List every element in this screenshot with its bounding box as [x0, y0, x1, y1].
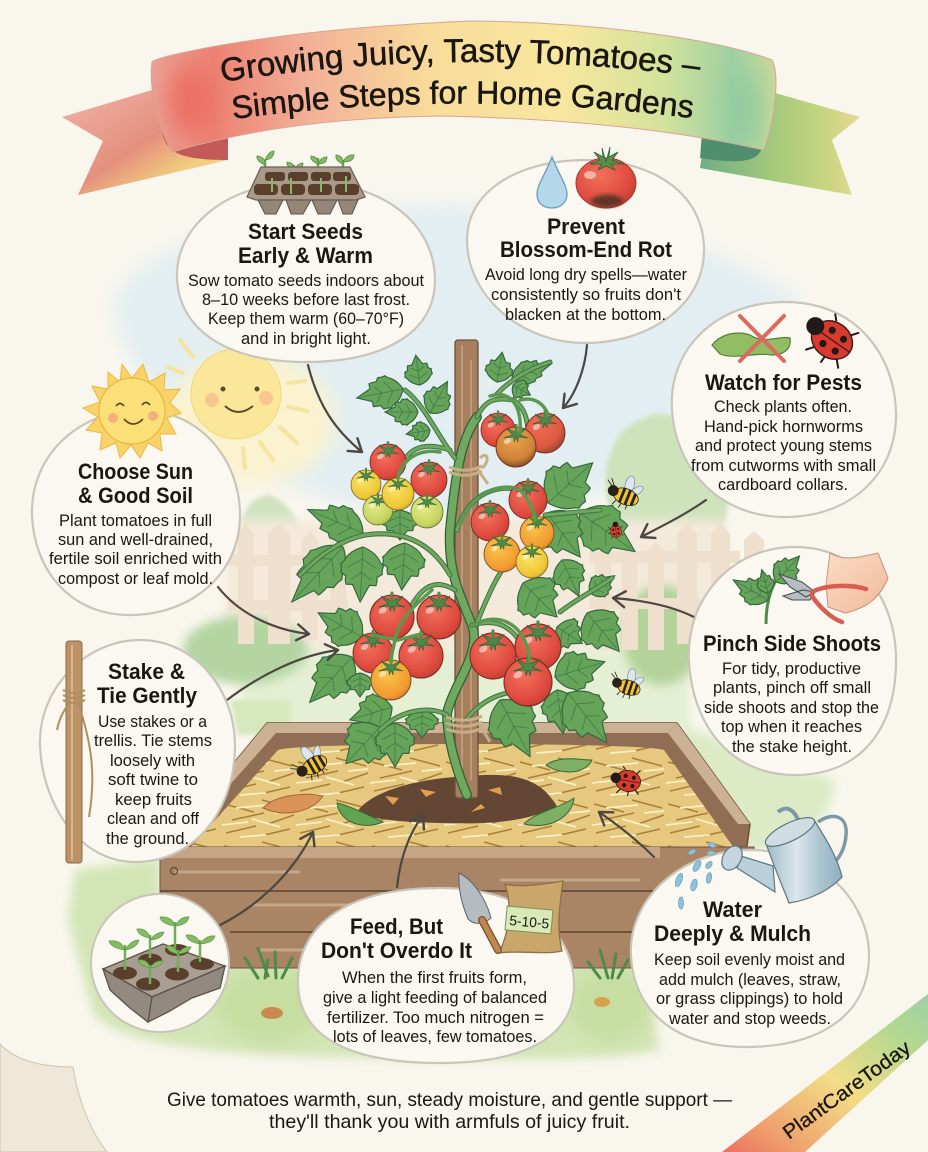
body text: For tidy, productive [722, 659, 861, 678]
heading: Watch for Pests [705, 370, 862, 395]
icon: seedling tray [103, 917, 225, 1022]
grass tufts and fallen seeds [245, 948, 628, 1019]
icon: fertilizer bag [499, 881, 563, 953]
body text [188, 271, 424, 348]
body text: top when it reaches [721, 717, 862, 736]
body text: Sow tomato seeds indoors about [188, 271, 424, 290]
panel: water deeply and mulch [631, 809, 869, 1047]
body text: Use stakes or a [98, 712, 207, 731]
body text: Hand-pick hornworms [704, 417, 863, 436]
top left cluster [351, 441, 447, 528]
left ribbon tail [62, 90, 228, 195]
heading: Prevent [547, 214, 625, 239]
icon: watering can [718, 809, 846, 903]
heading [500, 214, 672, 262]
body text [94, 712, 212, 848]
footer message: Give tomatoes warmth, sun, steady moisture, and gentle support — [167, 1089, 732, 1111]
heading: Early & Warm [238, 243, 373, 268]
body text [49, 511, 222, 588]
lower right cluster [470, 621, 561, 706]
title text: Simple Steps for Home Gardens [233, 80, 693, 120]
watercolor blotch [168, 66, 765, 150]
tomato plant illustration [276, 340, 649, 798]
icon: pruning shears and hand [779, 553, 888, 622]
heading: Water [703, 897, 762, 922]
body text: sun and well-drained, [58, 530, 213, 549]
body text: add mulch (leaves, straw, [659, 970, 841, 989]
brand corner ribbon [722, 994, 928, 1152]
soil mound [357, 775, 557, 823]
panel: start seeds early and warm [177, 151, 435, 362]
main band [151, 21, 776, 152]
heading: Tie Gently [97, 683, 197, 708]
brand corner ribbon: PlantCareToday [779, 1037, 915, 1144]
panel: prevent blossom-end rot [467, 147, 704, 343]
heading [78, 459, 193, 508]
fold shadows [162, 130, 228, 160]
body text: Check plants often. [714, 397, 852, 416]
leaves [276, 350, 649, 779]
body text [704, 659, 879, 756]
arrows from callouts to the plant [218, 345, 706, 925]
body text: fertilizer. Too much nitrogen = [327, 1008, 544, 1027]
body text: trellis. Tie stems [94, 731, 212, 750]
heading: Start Seeds [248, 219, 363, 244]
panel: seedling tray bubble [91, 894, 229, 1032]
title ribbon [62, 20, 860, 195]
footer message: they'll thank you with armfuls of juicy fruit. [269, 1111, 630, 1133]
heading: Pinch Side Shoots [703, 631, 881, 656]
icon: fertilizer bag: 5-10-5 [509, 912, 550, 931]
body text [485, 265, 687, 324]
icon: tomato with rot [576, 147, 636, 208]
heading [321, 914, 472, 963]
background scene: sky, foliage and grass washes [68, 205, 835, 1060]
icon: water drops [674, 842, 717, 909]
stems [300, 362, 612, 795]
front boards [160, 847, 754, 968]
footer message [167, 1089, 732, 1133]
body text: and protect young stems [695, 436, 872, 455]
panel: feed but don't overdo it [298, 873, 574, 1063]
heading: Choose Sun [78, 459, 193, 484]
body text: side shoots and stop the [704, 698, 879, 717]
panel: watch for pests [672, 302, 896, 517]
faded sun behind plant [167, 340, 307, 468]
body text: Avoid long dry spells—water [485, 265, 687, 284]
body text [654, 950, 845, 1028]
body text: fertile soil enriched with [49, 549, 222, 568]
body text: compost or leaf mold. [58, 569, 213, 588]
heading [654, 897, 811, 946]
insects around the plant [284, 468, 646, 798]
title text: Growing Juicy, Tasty Tomatoes – [221, 39, 700, 81]
icon: water drop [537, 157, 567, 208]
icon: ladybug [792, 303, 863, 373]
body text: give a light feeding of balanced [323, 988, 547, 1007]
body text: blacken at the bottom. [505, 305, 666, 324]
heading: Blossom-End Rot [500, 237, 672, 262]
panel: pinch side shoots [689, 547, 896, 775]
middle right cluster [471, 478, 554, 578]
body text: and in bright light. [241, 329, 371, 348]
icon: hand trowel [459, 873, 498, 950]
heading: Stake & [108, 659, 185, 684]
picket fence [228, 523, 764, 650]
body text: clean and off [107, 809, 199, 828]
right ribbon tail [700, 93, 860, 195]
tomato clusters [351, 410, 565, 706]
fallen leaves on mulch [263, 759, 592, 826]
panel: stake and tie gently [40, 640, 235, 863]
wooden stake [455, 340, 478, 798]
body text: soft twine to [108, 770, 198, 789]
body text: Keep them warm (60–70°F) [208, 309, 404, 328]
bed walls [160, 723, 750, 860]
body text: or grass clippings) to hold [656, 989, 843, 1008]
body text: When the first fruits form, [342, 968, 527, 987]
body text: loosely with [110, 751, 195, 770]
body text: Keep soil evenly moist and [654, 950, 845, 969]
panel: choose sun and good soil [32, 364, 240, 615]
icon: smiling sun [83, 364, 181, 458]
body text: cardboard collars. [718, 475, 848, 494]
body text: the ground. [106, 829, 189, 848]
title text [221, 39, 700, 120]
icon: seedling tray [247, 151, 365, 214]
heading: & Good Soil [78, 483, 193, 508]
body text [691, 397, 876, 494]
page curl bottom left [0, 1044, 107, 1152]
twine ties [446, 455, 490, 742]
heading: Deeply & Mulch [654, 921, 811, 946]
body text: 8–10 weeks before last frost. [202, 290, 410, 309]
body text [323, 968, 547, 1046]
heading [238, 219, 373, 268]
heading: Don't Overdo It [321, 938, 472, 963]
body text: from cutworms with small [691, 456, 876, 475]
icon: tomato sprig [727, 547, 809, 624]
body text: lots of leaves, few tomatoes. [333, 1027, 537, 1046]
icon: hornworm crossed out [712, 316, 790, 361]
lower left cluster [353, 592, 461, 700]
body text: water and stop weeds. [668, 1009, 831, 1028]
icon: stake with twine [57, 641, 92, 863]
body text: plants, pinch off small [713, 678, 871, 697]
body text: Plant tomatoes in full [59, 511, 212, 530]
heading: Feed, But [350, 914, 443, 939]
heading [97, 659, 197, 708]
body text: consistently so fruits don't [491, 285, 681, 304]
straw mulch [190, 744, 734, 848]
top right cluster [481, 410, 565, 467]
body text: keep fruits [115, 790, 192, 809]
fruit stems over tomatoes [373, 395, 548, 662]
raised garden bed [160, 723, 754, 968]
body text: the stake height. [732, 737, 852, 756]
